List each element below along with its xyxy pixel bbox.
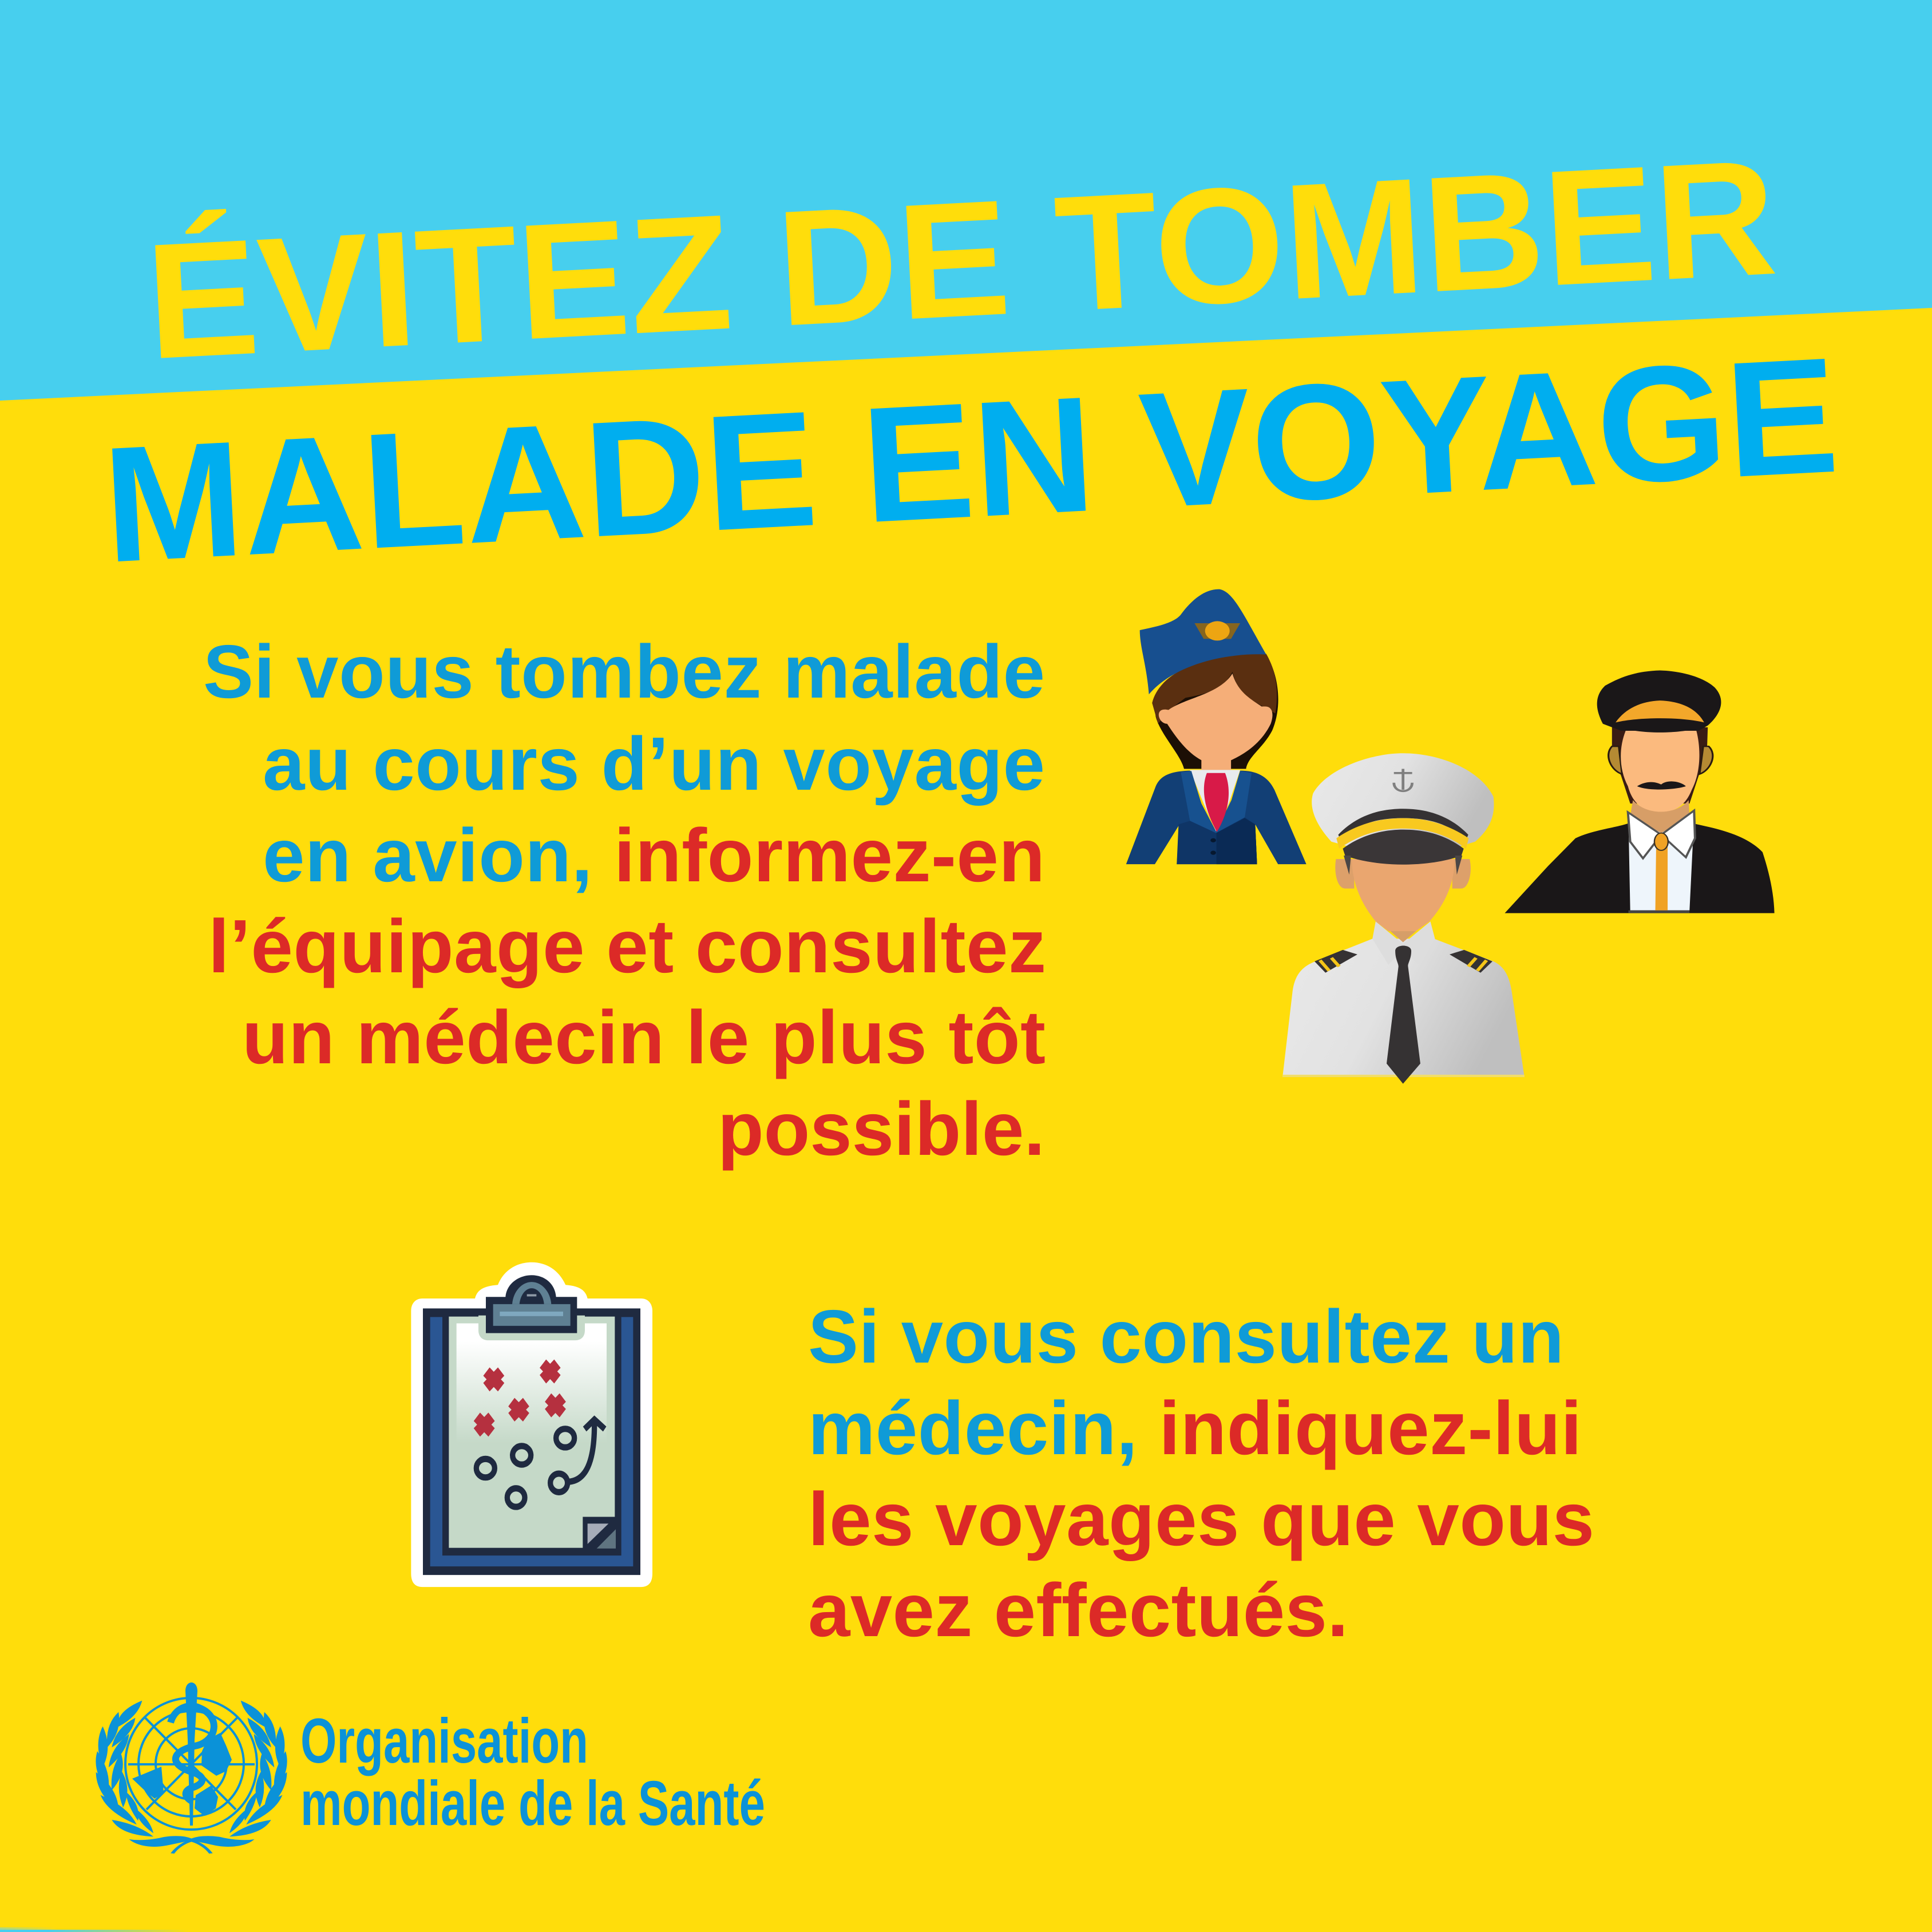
icon: flight attendant [1126, 589, 1307, 864]
icon: ship captain [1282, 753, 1525, 1084]
text block: in-flight advice: au cours d’un voyage [263, 722, 1045, 806]
logo: organisation name [300, 1706, 765, 1839]
logo: WHO emblem [96, 1682, 287, 1854]
logo: organisation name: Organisation [300, 1706, 588, 1776]
text block: tell your doctor [808, 1294, 1594, 1652]
bottom edge sliver [0, 1927, 189, 1932]
red crosses [477, 1364, 563, 1432]
text block: tell your doctor: Si vous consultez un [808, 1294, 1564, 1379]
logo: organisation name: mondiale de la Santé [300, 1768, 765, 1839]
background: cyan diagonal band [0, 0, 1932, 401]
text block: tell your doctor: les voyages que vous [808, 1477, 1594, 1561]
text block: tell your doctor: médecin, indiquez-lui [808, 1386, 1582, 1470]
text block: in-flight advice: Si vous tombez malade [203, 630, 1045, 714]
text block: in-flight advice: possible. [718, 1087, 1045, 1171]
text block: in-flight advice: un médecin le plus tôt [242, 995, 1046, 1079]
text block: in-flight advice [203, 630, 1046, 1171]
globe [125, 1698, 257, 1830]
circles and arrow [476, 1420, 605, 1507]
text block: in-flight advice: en avion, informez-en [263, 813, 1045, 897]
continents [132, 1767, 164, 1799]
rod and snake [185, 1682, 197, 1826]
text block: in-flight advice: l’équipage et consultez [208, 904, 1046, 988]
text block: tell your doctor: avez effectués. [808, 1568, 1348, 1652]
title line 1: ÉVITEZ DE TOMBER [142, 125, 1780, 394]
icon: conductor [1505, 670, 1775, 913]
title line 2: MALADE EN VOYAGE [99, 323, 1842, 597]
icon: clipboard with play diagram [411, 1262, 652, 1587]
wreath and ribbon [96, 1701, 287, 1854]
